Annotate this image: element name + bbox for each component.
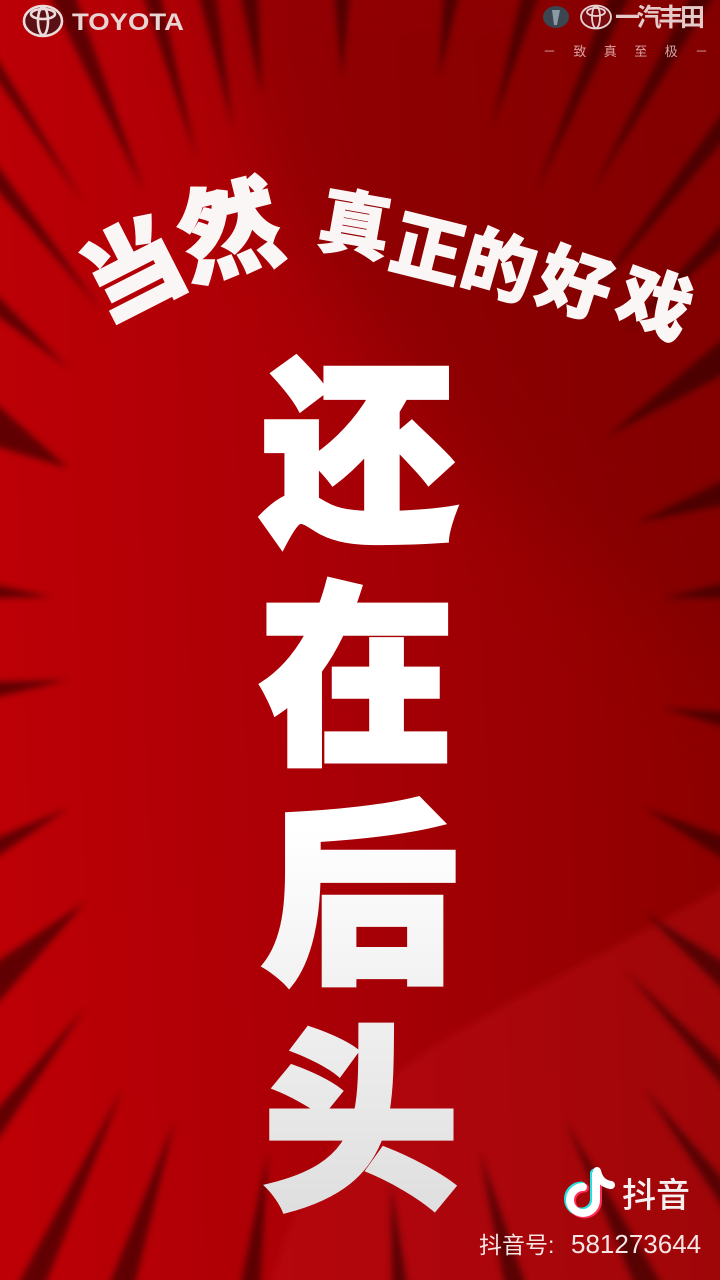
heading: vertical main title: 在	[260, 571, 454, 789]
heading: curved line: 戏	[607, 255, 702, 355]
dark upper band	[200, 0, 720, 720]
lighter lower-right band	[260, 865, 720, 1280]
icon: Douyin note	[568, 1171, 611, 1214]
label: account number: 581273644	[571, 1229, 701, 1259]
heading: curved line: 正	[383, 203, 472, 298]
label: account number: 抖音号:	[479, 1232, 554, 1258]
logo: FAW Toyota	[543, 0, 708, 60]
label: 抖音: 抖音	[622, 1168, 690, 1217]
wordmark: TOYOTA: TOYOTA	[72, 9, 184, 36]
tagline: － 致 真 至 极 －	[543, 41, 708, 60]
heading: curved line	[65, 165, 702, 355]
icon: Toyota emblem small	[581, 6, 611, 28]
heading: vertical main title: 还	[262, 349, 456, 567]
heading: curved line: 的	[453, 219, 544, 316]
heading: vertical main title: 头	[264, 1016, 458, 1234]
logo: Toyota	[24, 6, 184, 36]
heading: vertical main title	[260, 349, 458, 1234]
heading: curved line: 真	[312, 181, 397, 273]
heading: curved line: 好	[528, 237, 621, 335]
icon: Toyota emblem	[24, 6, 62, 36]
heading: vertical main title: 后	[262, 790, 458, 1008]
icon: FAW emblem	[543, 6, 569, 28]
heading: curved line: 当	[65, 200, 202, 342]
heading: curved line: 然	[167, 165, 294, 300]
watermark: Douyin	[479, 1168, 701, 1259]
